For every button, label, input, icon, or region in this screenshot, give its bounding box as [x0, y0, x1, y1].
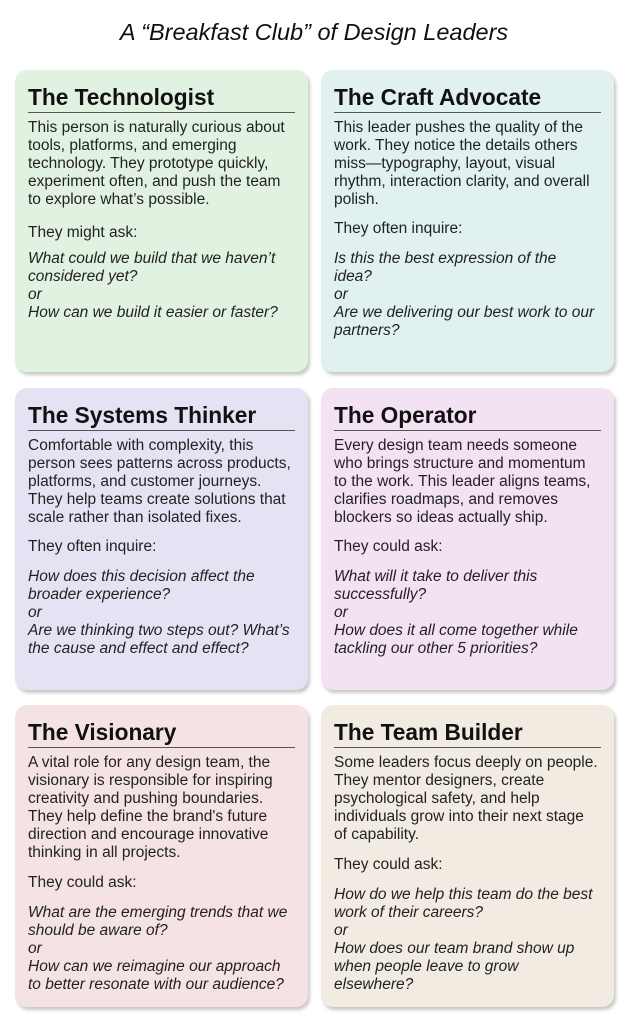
questions: broader experience? [28, 586, 170, 603]
description: miss—typography, layout, visual [334, 155, 555, 172]
questions [333, 250, 595, 339]
description: to explore what’s possible. [28, 191, 210, 208]
description: creativity and pushing boundaries. [28, 790, 263, 807]
questions: Is this the best expression of the [334, 250, 556, 267]
questions: considered yet? [28, 268, 137, 285]
description: technology. They prototype quickly, [28, 155, 268, 172]
questions [334, 568, 578, 657]
description: individuals grow into their next stage [334, 808, 584, 825]
description: of capability. [334, 826, 419, 843]
description [334, 119, 590, 208]
description: thinking in all projects. [28, 844, 180, 861]
questions: or [334, 604, 348, 621]
description: polish. [334, 191, 379, 208]
questions: or [28, 940, 42, 957]
questions: or [334, 286, 348, 303]
questions: How does this decision affect the [28, 568, 255, 585]
questions: Are we delivering our best work to our [334, 304, 594, 321]
description: experiment often, and push the team [28, 173, 280, 190]
heading [28, 719, 295, 748]
prompt: They could ask: [28, 874, 137, 891]
description: rhythm, interaction clarity, and overall [334, 173, 590, 190]
description: clarifies roadmaps, and removes [334, 491, 558, 508]
description: person sees patterns across products, [28, 455, 291, 472]
panel: craft advocate [321, 70, 614, 372]
prompt: They could ask: [334, 538, 443, 555]
description: This leader pushes the quality of the [334, 119, 583, 136]
panel: visionary [15, 705, 308, 1007]
questions: when people leave to grow [334, 958, 518, 975]
description: Every design team needs someone [334, 437, 577, 454]
heading: The Systems Thinker [28, 402, 256, 428]
heading [28, 84, 295, 113]
panel: systems thinker [15, 388, 308, 690]
heading: The Team Builder [334, 719, 523, 745]
questions: should be aware of? [28, 922, 168, 939]
questions: How can we build it easier or faster? [28, 304, 278, 321]
questions: How do we help this team do the best [334, 886, 592, 903]
description: work. They notice the details others [334, 137, 578, 154]
heading: The Visionary [28, 719, 176, 745]
description [28, 119, 285, 208]
questions [334, 886, 593, 993]
questions: successfully? [334, 586, 426, 603]
heading: The Craft Advocate [334, 84, 541, 110]
questions [28, 904, 287, 993]
description: They mentor designers, create [334, 772, 544, 789]
prompt: They often inquire: [334, 220, 462, 237]
description: This person is naturally curious about [28, 119, 285, 136]
prompt: They could ask: [334, 856, 443, 873]
panel: operator [321, 388, 614, 690]
description [28, 754, 273, 861]
questions: partners? [334, 322, 399, 339]
description: direction and encourage innovative [28, 826, 268, 843]
heading: The Operator [334, 402, 476, 428]
description: Comfortable with complexity, this [28, 437, 253, 454]
questions: What could we build that we haven’t [28, 250, 275, 267]
prompt: They might ask: [28, 224, 137, 241]
description: Some leaders focus deeply on people. [334, 754, 598, 771]
description: They help define the brand's future [28, 808, 267, 825]
description: psychological safety, and help [334, 790, 540, 807]
panel: team builder [321, 705, 614, 1007]
questions: How does our team brand show up [334, 940, 574, 957]
prompt: They often inquire: [28, 538, 156, 555]
questions: or [28, 286, 42, 303]
description: visionary is responsible for inspiring [28, 772, 273, 789]
description: scale rather than isolated fixes. [28, 509, 242, 526]
description: platforms, and customer journeys. [28, 473, 261, 490]
questions: Are we thinking two steps out? What’s [28, 622, 290, 639]
questions: work of their careers? [334, 904, 483, 921]
panel: technologist [15, 70, 308, 372]
description: to the work. This leader aligns teams, [334, 473, 590, 490]
questions: or [334, 922, 348, 939]
title: A “Breakfast Club” of Design Leaders [120, 19, 508, 45]
description: blockers so ideas actually ship. [334, 509, 548, 526]
questions: How can we reimagine our approach [28, 958, 280, 975]
heading [334, 84, 601, 113]
description [28, 437, 291, 526]
questions: idea? [334, 268, 372, 285]
questions: to better resonate with our audience? [28, 976, 284, 993]
description: A vital role for any design team, the [28, 754, 270, 771]
description [334, 754, 598, 843]
questions: the cause and effect and effect? [28, 640, 249, 657]
heading [334, 402, 601, 431]
questions [28, 250, 278, 321]
heading: The Technologist [28, 84, 214, 110]
questions: or [28, 604, 42, 621]
questions: What will it take to deliver this [334, 568, 537, 585]
description [334, 437, 590, 526]
questions: What are the emerging trends that we [28, 904, 287, 921]
description: tools, platforms, and emerging [28, 137, 236, 154]
questions: elsewhere? [334, 976, 413, 993]
description: They help teams create solutions that [28, 491, 286, 508]
description: who brings structure and momentum [334, 455, 586, 472]
questions: tackling our other 5 priorities? [334, 640, 537, 657]
questions: How does it all come together while [334, 622, 578, 639]
heading [334, 719, 601, 748]
questions [27, 568, 290, 657]
